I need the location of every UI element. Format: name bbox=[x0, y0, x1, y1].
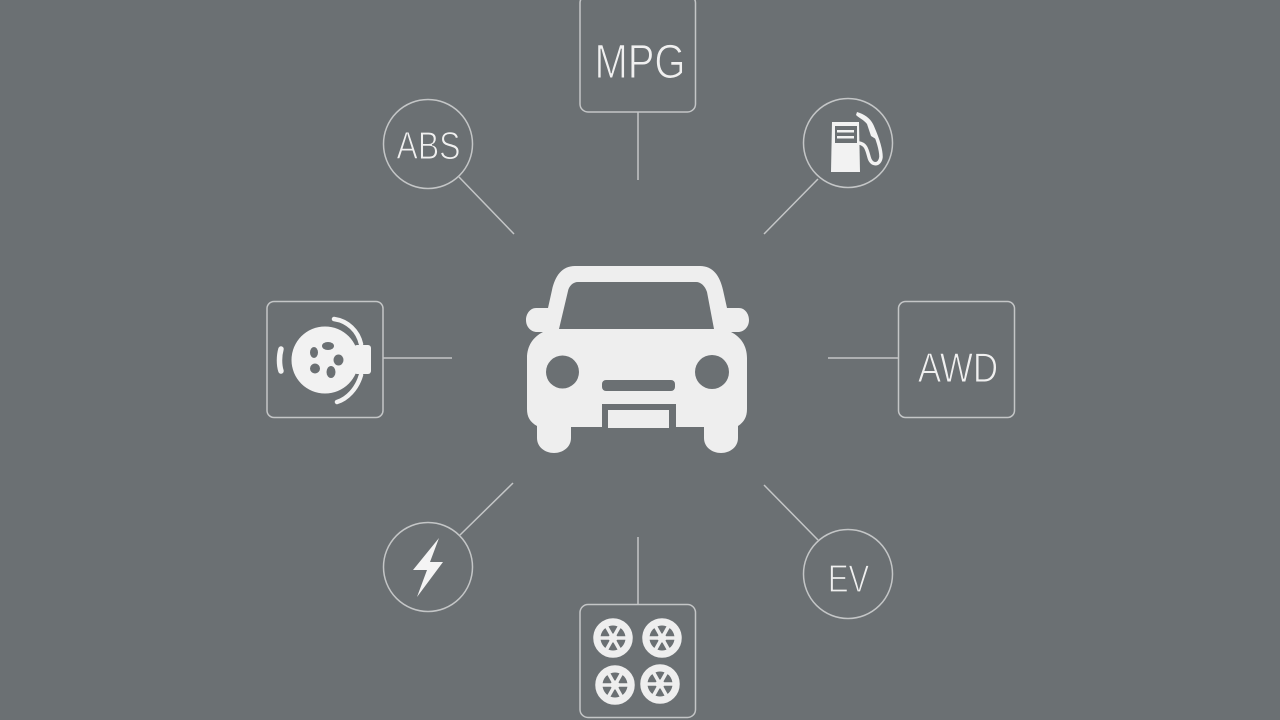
icon: wheel bottom right bbox=[644, 668, 676, 700]
box: brake disc bbox=[267, 302, 383, 418]
circle: ABS bbox=[384, 100, 472, 188]
box: AWD bbox=[898, 302, 1014, 418]
connector: lightning bbox=[460, 483, 513, 535]
connector: AWD bbox=[828, 357, 898, 359]
circle: ABS: ABS bbox=[396, 124, 461, 168]
box: AWD: AWD bbox=[918, 345, 998, 392]
circle: EV: EV bbox=[828, 556, 869, 601]
icon: lightning bolt bbox=[413, 538, 443, 597]
icon: fuel pump bbox=[831, 112, 881, 172]
connector: four wheels bbox=[637, 537, 639, 604]
box: MPG: MPG bbox=[594, 36, 686, 89]
circle: lightning bbox=[384, 522, 472, 612]
icon: wheel top right bbox=[646, 622, 678, 654]
icon: brake disc and caliper bbox=[280, 319, 371, 402]
circle: fuel pump bbox=[804, 98, 892, 188]
connector: brake disc bbox=[383, 357, 452, 359]
connector: fuel pump bbox=[764, 179, 818, 234]
box: MPG bbox=[580, 0, 696, 112]
connector: ABS bbox=[459, 177, 514, 234]
icon: wheel top left bbox=[597, 622, 629, 654]
connector: MPG bbox=[637, 112, 639, 180]
icon: wheel bottom left bbox=[599, 669, 631, 701]
box: four wheels bbox=[580, 604, 696, 718]
connector: EV bbox=[764, 485, 818, 540]
circle: EV bbox=[804, 530, 892, 618]
icon: central car front view bbox=[526, 266, 749, 453]
